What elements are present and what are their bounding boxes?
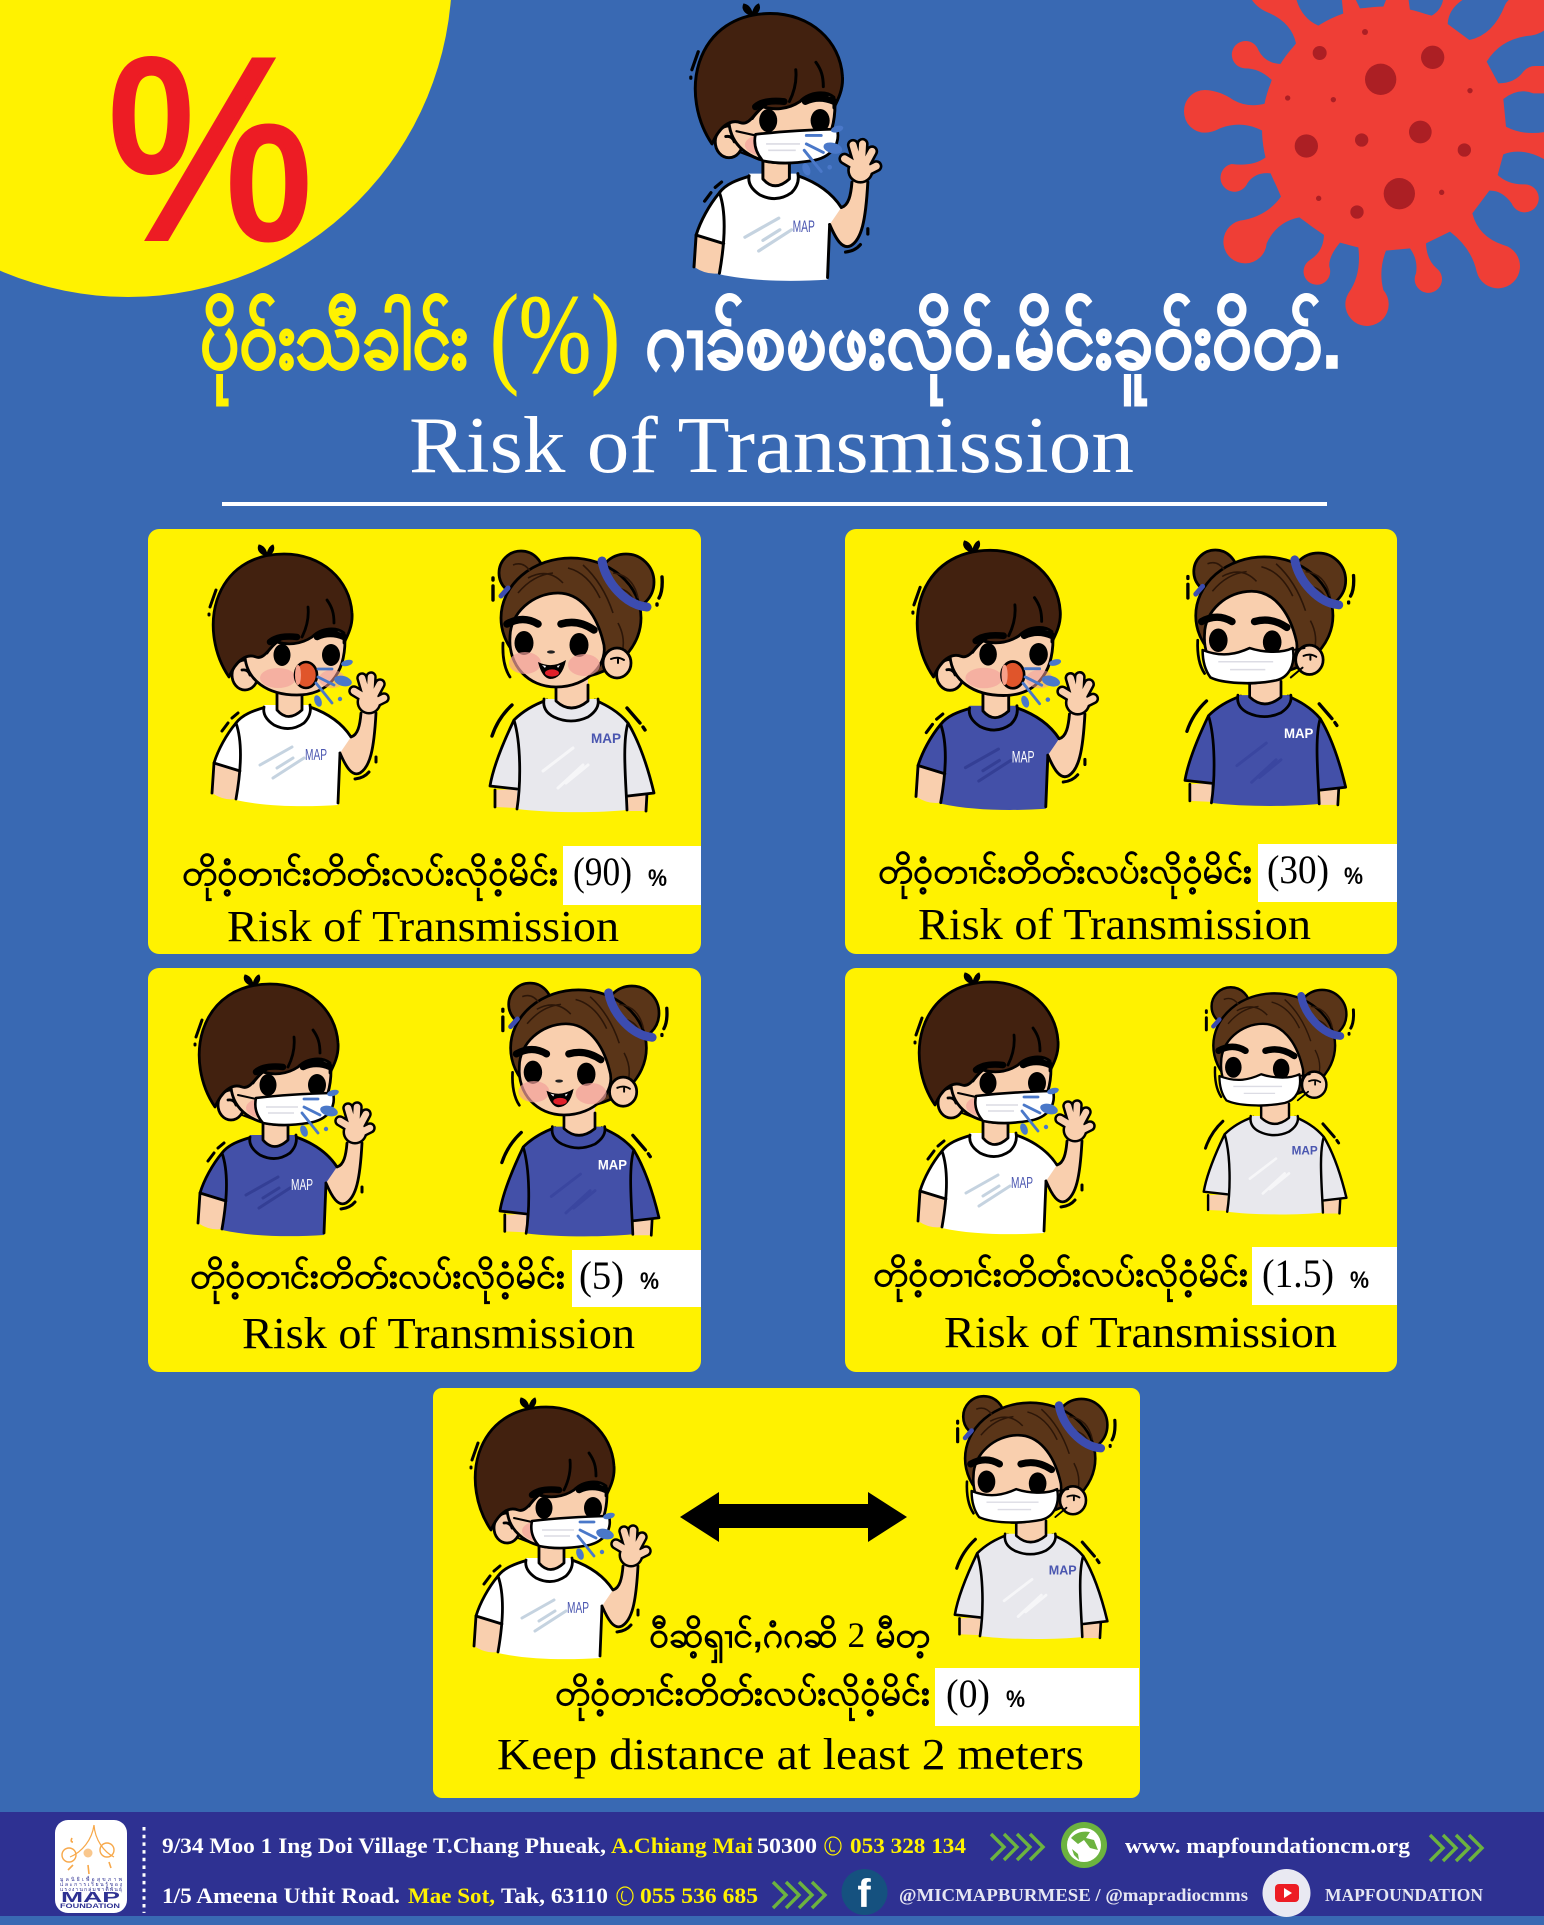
value box 5 percent: [572, 1250, 701, 1307]
girl smiling, navy shirt: MAP: [598, 1157, 627, 1172]
address line 1: [162, 1833, 966, 1858]
icon: globe: [1061, 1822, 1107, 1868]
girl masked, white shirt: [1204, 987, 1354, 1214]
boy masked, white shirt: MAP: [1011, 1175, 1033, 1192]
logo: MAP Foundation: [55, 1820, 127, 1913]
value box 0 percent: %: [1006, 1686, 1025, 1713]
girl masked, navy shirt: [1185, 550, 1354, 806]
boy masked, navy shirt: MAP: [291, 1177, 313, 1194]
label burmese: တိုဝံ့တၢင်းတိတ်းလပ်းလိုဝံ့မိင်း: [878, 850, 1252, 900]
title part yellow: ပိုဝ်းသီခါင်း: [200, 294, 468, 406]
boy coughing, navy shirt, no mask: MAP: [1012, 748, 1034, 766]
value box 1.5 percent: %: [1350, 1267, 1369, 1294]
footer band: [0, 1812, 1544, 1917]
icon: chevrons: [1430, 1835, 1482, 1861]
boy coughing, white shirt, no mask: [209, 545, 384, 806]
logo: MAP Foundation: และการเรียนรู้ของ: [60, 1881, 122, 1888]
icon: phone: [617, 1887, 633, 1905]
value box 0 percent: (0): [946, 1671, 990, 1716]
arrow: keep distance: [680, 1492, 907, 1542]
header character: coughing boy with mask: MAP: [793, 217, 815, 236]
logo: MAP Foundation: แรงงานกลุ่มชาติพันธุ์: [60, 1886, 122, 1893]
address line 2: Tak, 63110: [501, 1883, 608, 1908]
boy coughing, navy shirt, no mask: [913, 541, 1093, 810]
label english: Risk of Transmission: [918, 900, 1311, 949]
address line 2: 055 536 685: [640, 1883, 758, 1908]
boy masked, white shirt: MAP: [567, 1600, 589, 1617]
value box 1.5 percent: (1.5): [1262, 1251, 1334, 1296]
label english: Keep distance at least 2 meters: [497, 1730, 1084, 1779]
value box 30 percent: (30): [1267, 847, 1329, 892]
value box 90 percent: %: [648, 865, 667, 892]
title: burmese: [200, 273, 1342, 406]
label english: Risk of Transmission: [227, 902, 619, 951]
youtube handle: MAPFOUNDATION: [1325, 1885, 1483, 1905]
panel: no masks, 90 percent: [148, 529, 701, 954]
icon: chevrons: [773, 1882, 825, 1908]
logo: MAP Foundation: MAP: [61, 1889, 120, 1906]
title: english: Risk of Transmission: [409, 402, 1134, 490]
address line 2: Mae Sot,: [408, 1883, 495, 1908]
girl smiling, navy shirt: [500, 983, 667, 1236]
panel: one mask on cougher, 5 percent: [148, 968, 701, 1372]
address line 1: 9/34 Moo 1 Ing Doi Village T.Chang Phueak,: [162, 1833, 606, 1858]
girl masked, white shirt: MAP: [1049, 1563, 1077, 1578]
header character: coughing boy with mask: [691, 4, 876, 281]
girl masked, white shirt: MAP: [1292, 1143, 1318, 1157]
value box 0 percent: [935, 1668, 1139, 1726]
yellow corner circle: [0, 0, 452, 297]
address line 1: A.Chiang Mai: [611, 1833, 753, 1858]
label burmese: risk: တိုဝံ့တၢင်းတိတ်းလပ်းလိုဝံ့မိင်း: [555, 1672, 930, 1722]
girl masked, white shirt: [955, 1396, 1115, 1639]
panel: masked and 2 metres apart, 0 percent: [433, 1388, 1140, 1798]
title part white: ဂၢခ်စၿဖးလိုဝ်.မိင်းခူဝ်းဝိတ်.: [645, 294, 1342, 406]
label burmese: တိုဝံ့တၢင်းတိတ်းလပ်းလိုဝံ့မိင်း: [873, 1253, 1248, 1303]
boy masked, navy shirt: [195, 975, 370, 1236]
value box 30 percent: %: [1344, 863, 1363, 890]
value box 90 percent: [563, 846, 701, 905]
icon: phone: [825, 1837, 841, 1855]
address line 1: 50300: [757, 1833, 817, 1858]
label burmese: တိုဝံ့တၢင်းတိတ်းလပ်းလိုဝံ့မိင်း: [182, 852, 558, 902]
title percent in brackets: (%): [490, 273, 620, 397]
girl masked, navy shirt: MAP: [1284, 726, 1313, 741]
address line 1: 053 328 134: [850, 1833, 966, 1858]
icon: youtube: [1262, 1869, 1310, 1917]
logo: MAP Foundation: มูลนิธิเพื่อสุขภาพ: [60, 1876, 123, 1883]
girl smiling, white shirt, no mask: [490, 551, 662, 812]
website: www. mapfoundationcm.org: [1125, 1833, 1410, 1858]
boy coughing, white shirt, no mask: MAP: [305, 747, 327, 764]
icon: red virus: [1184, 0, 1544, 326]
address line 2: [162, 1883, 758, 1908]
address line 2: 1/5 Ameena Uthit Road.: [162, 1883, 400, 1908]
social handles: @MICMAPBURMESE / @mapradiocmms: [899, 1885, 1248, 1905]
label english: Risk of Transmission: [944, 1308, 1337, 1357]
icon: facebook: f: [857, 1872, 871, 1916]
label english: Risk of Transmission: [242, 1309, 635, 1358]
panel: one mask on listener, 30 percent: [845, 529, 1397, 954]
icon: chevrons: [991, 1834, 1043, 1860]
logo: MAP Foundation: FOUNDATION: [60, 1904, 120, 1910]
icon: facebook: [842, 1869, 888, 1916]
value box 5 percent: (5): [579, 1253, 624, 1298]
girl smiling, white shirt, no mask: MAP: [591, 730, 621, 746]
label burmese: တိုဝံ့တၢင်းတိတ်းလပ်းလိုဝံ့မိင်း: [190, 1255, 565, 1305]
boy masked, white shirt: [471, 1398, 646, 1659]
big percent sign: %: [107, 4, 313, 293]
label burmese: distance: ဝီဆိ့ၡၢင်,ဂံဂဆိ 2 မီတ့: [649, 1614, 930, 1664]
boy masked, white shirt: [915, 973, 1090, 1234]
panel: both masked, 1.5 percent: [845, 968, 1397, 1372]
value box 90 percent: (90): [573, 849, 632, 894]
value box 30 percent: [1258, 844, 1397, 902]
value box 5 percent: %: [640, 1268, 659, 1295]
value box 1.5 percent: [1252, 1247, 1397, 1305]
